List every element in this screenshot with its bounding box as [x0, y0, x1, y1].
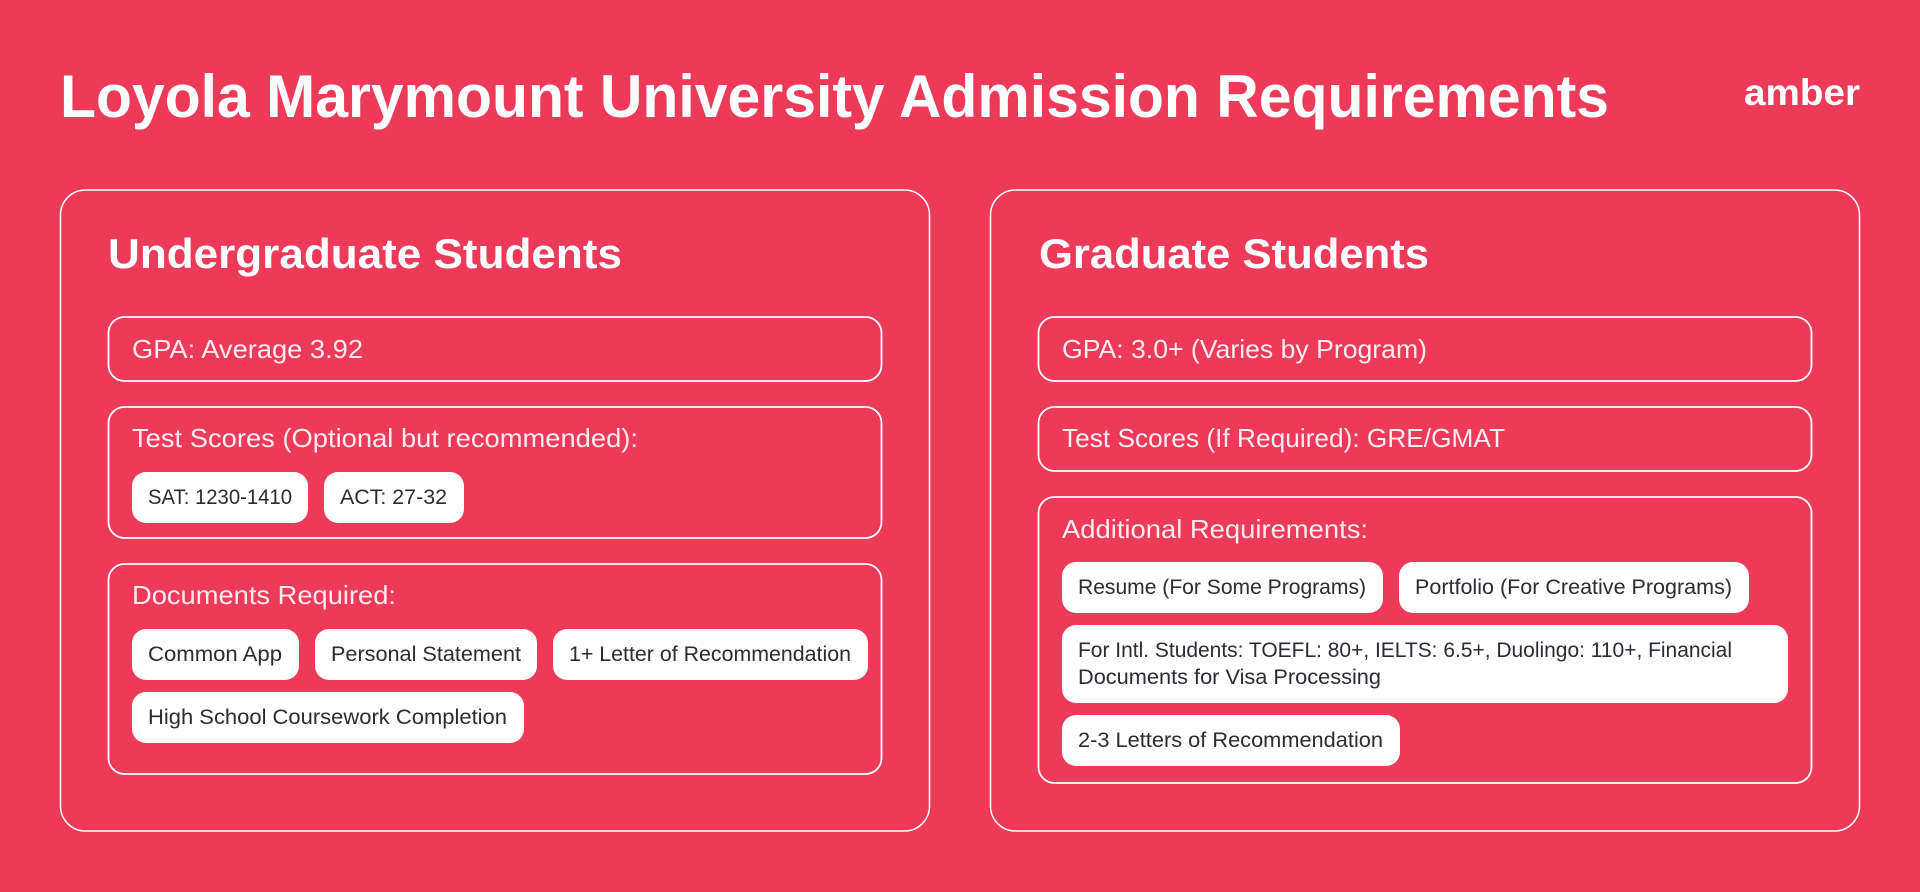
chip: resume: [1062, 562, 1383, 613]
card: additional requirements: [1038, 497, 1812, 783]
title: Loyola Marymount University Admission Requirements: [60, 63, 1609, 130]
card: test scores: [108, 407, 882, 538]
chip: resume: Resume (For Some Programs): [1078, 576, 1366, 599]
card: GPA: [108, 317, 882, 381]
panel: undergraduate students: [60, 190, 930, 831]
chip: common app: Common App: [148, 643, 282, 666]
heading: graduate students: Graduate Students: [1039, 230, 1429, 277]
chip: SAT: SAT: 1230-1410: [148, 486, 292, 509]
chip: personal statement: Personal Statement: [331, 643, 521, 666]
chip: high school coursework: High School Coursework Completion: [148, 706, 507, 729]
chip: international students: Documents for Visa Processing: [1078, 666, 1381, 689]
heading: undergraduate students: Undergraduate Students: [108, 230, 622, 277]
chip: ACT: [324, 472, 464, 523]
card: additional requirements: Additional Requirements:: [1062, 514, 1368, 544]
chip: SAT: [132, 472, 308, 523]
card: GPA: GPA: Average 3.92: [132, 334, 363, 364]
chip: ACT: ACT: 27-32: [340, 486, 447, 509]
chip: international students: [1062, 625, 1788, 703]
chip: common app: [132, 629, 299, 680]
panel: graduate students: [990, 190, 1860, 831]
card: test scores: [1038, 407, 1812, 471]
card: GPA: GPA: 3.0+ (Varies by Program): [1062, 334, 1427, 364]
chip: portfolio: [1399, 562, 1749, 613]
chip: letters of recommendation: 2-3 Letters of Recommendation: [1078, 729, 1383, 752]
card: test scores: Test Scores (If Required): GRE/GMAT: [1062, 423, 1505, 453]
logo: amber: amber: [1744, 72, 1860, 113]
card: documents required: Documents Required:: [132, 580, 396, 610]
chip: letter of recommendation: [553, 629, 868, 680]
chip: international students: For Intl. Students: TOEFL: 80+, IELTS: 6.5+, Duolingo: 110+, Financial: [1078, 639, 1732, 662]
card: GPA: [1038, 317, 1812, 381]
chip: letters of recommendation: [1062, 715, 1400, 766]
chip: personal statement: [315, 629, 537, 680]
chip: high school coursework: [132, 692, 524, 743]
chip: letter of recommendation: 1+ Letter of Recommendation: [569, 643, 851, 666]
chip: portfolio: Portfolio (For Creative Programs): [1415, 576, 1732, 599]
card: test scores: Test Scores (Optional but recommended):: [132, 423, 638, 453]
card: documents required: [108, 564, 882, 774]
